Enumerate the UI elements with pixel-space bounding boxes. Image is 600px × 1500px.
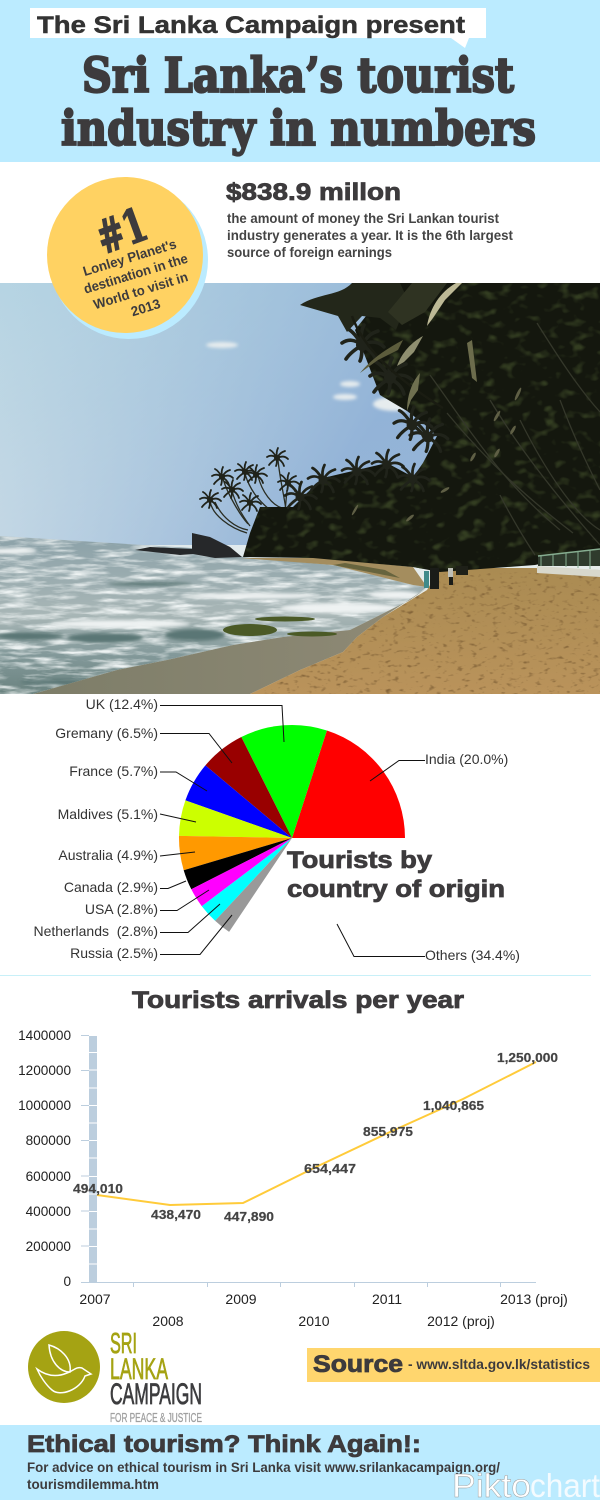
line chart: tourist arrivals per year: 438,470: [151, 1208, 201, 1222]
pie chart heading: [287, 847, 505, 903]
line chart: tourist arrivals per year: 1,040,865: [423, 1099, 484, 1113]
line chart: tourist arrivals per year: 2013 (proj): [500, 1291, 568, 1307]
line chart: tourist arrivals per year: 1200000: [18, 1063, 71, 1078]
line chart: tourist arrivals per year: 600000: [26, 1169, 71, 1184]
pie chart: tourists by country of origin: USA (2.8%): [85, 901, 158, 917]
pie chart: tourists by country of origin: India (20.0%): [425, 751, 508, 767]
Piktochart watermark: [452, 1467, 600, 1500]
stat: money generated: [226, 179, 513, 260]
pie chart: tourists by country of origin: Australia (4.9%): [58, 847, 158, 863]
line chart: tourist arrivals per year: 855,975: [363, 1125, 413, 1139]
title: [61, 48, 536, 157]
badge number: #1: [89, 197, 154, 265]
icon: dove in circle: [28, 1331, 100, 1403]
pie chart: tourists by country of origin: Netherlands (2.8%): [33, 923, 158, 939]
title: industry in numbers: [61, 101, 536, 157]
line chart: tourist arrivals per year: 800000: [26, 1133, 71, 1148]
pie chart: tourists by country of origin: Canada (2.9%): [64, 879, 158, 895]
stat: money generated: the amount of money the Sri Lankan tourist: [227, 211, 499, 226]
line chart: tourist arrivals per year: 2008: [152, 1313, 184, 1329]
logo: Sri Lanka Campaign: LANKA: [110, 1353, 168, 1386]
speech bubble heading: The Sri Lanka Campaign present: [37, 12, 465, 39]
logo: Sri Lanka Campaign: CAMPAIGN: [110, 1378, 202, 1411]
stat: money generated: source of foreign earnings: [227, 245, 392, 260]
line chart: tourist arrivals per year: 2007: [79, 1291, 111, 1307]
line chart: tourist arrivals per year: 1400000: [18, 1028, 71, 1043]
line chart: tourist arrivals per year: 494,010: [73, 1182, 123, 1196]
source box: Source: [313, 1351, 403, 1378]
source box: [307, 1348, 600, 1382]
line chart: tourist arrivals per year: 1,250,000: [497, 1051, 558, 1065]
chart heading: Tourists arrivals per year: [132, 987, 464, 1014]
badge text: Lonley Planet's: [81, 236, 178, 279]
footer text: [27, 1460, 500, 1492]
pie chart: tourists by country of origin: France (5.7%): [69, 763, 158, 779]
badge: number one destination: [47, 177, 208, 339]
line chart: tourist arrivals per year: 200000: [26, 1239, 71, 1254]
line chart: tourist arrivals per year: 2012 (proj): [427, 1313, 495, 1329]
line chart: tourist arrivals per year: 1000000: [18, 1098, 71, 1113]
pie chart: tourists by country of origin: [33, 696, 520, 963]
photo: beach with palm trees: [0, 283, 600, 694]
line chart: tourist arrivals per year: 2010: [298, 1313, 330, 1329]
pie chart: tourists by country of origin: Gremany (6.5%): [55, 725, 158, 741]
line chart: tourist arrivals per year: [18, 987, 568, 1329]
line chart: tourist arrivals per year: 2011: [372, 1291, 402, 1307]
stat: money generated: industry generates a year. It is the 6th largest: [227, 228, 513, 243]
logo: Sri Lanka Campaign: [28, 1328, 202, 1425]
badge text: [81, 236, 190, 319]
badge text: destination in the: [82, 251, 190, 297]
speech bubble heading: [30, 8, 486, 48]
pie chart: tourists by country of origin: Maldives (5.1%): [58, 806, 158, 822]
panel: footer: [0, 1425, 600, 1500]
line chart: tourist arrivals per year: 654,447: [304, 1162, 356, 1176]
pie chart: tourists by country of origin: UK (12.4%): [86, 696, 158, 712]
title: Sri Lanka’s tourist: [82, 48, 514, 104]
footer text: tourismdilemma.htm: [27, 1477, 159, 1492]
line chart: tourist arrivals per year: 2009: [225, 1291, 257, 1307]
badge text: World to visit in: [92, 269, 190, 312]
pie chart: tourists by country of origin: Others (34.4%): [425, 947, 520, 963]
badge text: 2013: [129, 296, 163, 319]
pie chart: tourists by country of origin: Russia (2.5%): [70, 945, 158, 961]
source box: - www.sltda.gov.lk/statistics: [408, 1356, 590, 1372]
panel: header: [0, 0, 600, 162]
line chart: tourist arrivals per year: 0: [63, 1274, 71, 1289]
footer text: For advice on ethical tourism in Sri Lanka visit www.srilankacampaign.org/: [27, 1460, 500, 1475]
line chart: tourist arrivals per year: 447,890: [224, 1210, 274, 1224]
line chart: tourist arrivals per year: 400000: [26, 1204, 71, 1219]
pie chart heading: Tourists by: [287, 847, 433, 874]
logo: Sri Lanka Campaign: SRI: [110, 1328, 137, 1360]
logo: Sri Lanka Campaign: FOR PEACE & JUSTICE: [110, 1411, 202, 1425]
footer heading: Ethical tourism? Think Again!:: [27, 1431, 421, 1458]
stat: money generated: $838.9 millon: [226, 179, 401, 206]
pie chart heading: country of origin: [287, 876, 505, 903]
